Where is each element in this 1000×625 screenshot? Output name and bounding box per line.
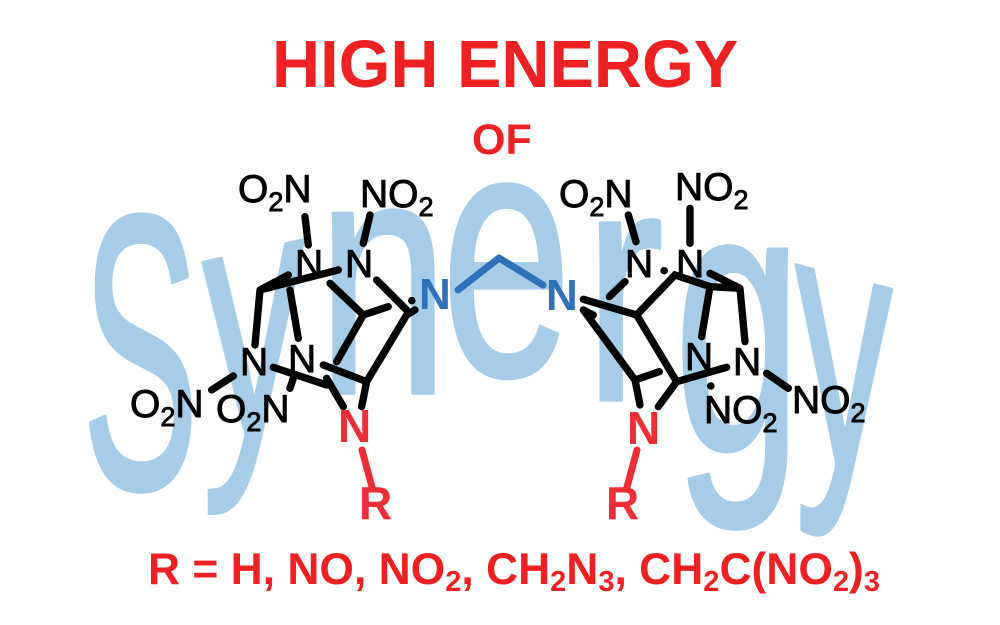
watermark word: Synergy: e — [441, 53, 572, 450]
left molecule atom labels: 2 — [160, 402, 175, 432]
watermark word: Synergy: r — [584, 96, 664, 471]
watermark word: Synergy — [82, 53, 893, 572]
right molecule atom labels: N — [625, 243, 653, 286]
left molecule atom labels: N — [288, 338, 316, 381]
red nitrogen and R labels: R — [606, 477, 639, 529]
blue nitrogen labels: N — [419, 270, 451, 319]
substituent legend: N — [566, 545, 598, 594]
substituent legend: ) — [849, 545, 864, 594]
red nitrogen and R labels — [338, 400, 660, 529]
left molecule atom labels: N — [175, 383, 204, 426]
left molecule atom labels: O — [216, 388, 246, 431]
left molecule atom labels: 2 — [418, 192, 434, 222]
left molecule atom labels: O — [130, 383, 160, 426]
red R bonds — [362, 450, 637, 487]
right molecule atom labels: N — [685, 336, 713, 379]
right molecule atom labels: N — [604, 173, 633, 216]
right molecule atom labels: NO — [675, 166, 734, 209]
right molecule atom labels: 2 — [589, 192, 604, 222]
left molecule atom labels: NO — [360, 173, 418, 216]
left molecule atom labels: N — [283, 168, 312, 211]
watermark word: Synergy: y — [202, 109, 304, 520]
left molecule atom labels: N — [345, 243, 373, 286]
watermark word: Synergy: S — [82, 134, 199, 572]
subtitle: OF — [472, 116, 532, 164]
right molecule cage bonds — [583, 208, 788, 407]
watermark word: Synergy: g — [674, 106, 802, 533]
right molecule atom labels: NO — [704, 389, 762, 432]
right molecule atom labels: 2 — [850, 398, 866, 428]
substituent legend: C(NO — [719, 545, 833, 594]
red nitrogen and R labels: N — [627, 402, 660, 454]
right molecule atom labels: O — [559, 173, 589, 216]
watermark word: Synergy: y — [795, 129, 893, 559]
watermark word: Synergy: n — [317, 87, 449, 466]
substituent legend: , CH — [461, 545, 550, 594]
right molecule atom labels: 2 — [762, 408, 778, 438]
right molecule atom labels: NO — [792, 379, 850, 422]
substituent legend: 2 — [703, 566, 719, 598]
substituent legend: 2 — [445, 566, 461, 598]
left molecule atom labels: 2 — [268, 187, 283, 217]
left molecule atom labels: O — [238, 168, 268, 211]
left molecule cage bonds — [212, 215, 415, 407]
red nitrogen and R labels: R — [359, 477, 392, 529]
right molecule atom labels: N — [676, 243, 704, 286]
title: HIGH ENERGY — [272, 28, 738, 102]
right molecule atom labels: 2 — [734, 185, 749, 215]
blue nitrogen labels: N — [546, 271, 578, 320]
right molecule atom labels: N — [733, 341, 761, 384]
left molecule atom labels: N — [261, 388, 290, 431]
left molecule atom labels: N — [240, 341, 268, 384]
substituent legend: 3 — [598, 566, 614, 598]
blue nitrogen labels — [419, 270, 578, 320]
left molecule atom labels: 2 — [246, 407, 261, 437]
substituent legend: , CH — [614, 545, 703, 594]
left molecule atom labels — [130, 168, 434, 437]
substituent legend: R = H, NO, NO — [148, 545, 445, 594]
left molecule atom labels: N — [295, 243, 323, 286]
substituent legend: 3 — [864, 566, 880, 598]
substituent legend: 2 — [550, 566, 566, 598]
substituent legend: 2 — [833, 566, 849, 598]
blue methylene linker — [458, 258, 543, 290]
red nitrogen and R labels: N — [338, 400, 371, 452]
right molecule atom labels — [559, 166, 866, 438]
